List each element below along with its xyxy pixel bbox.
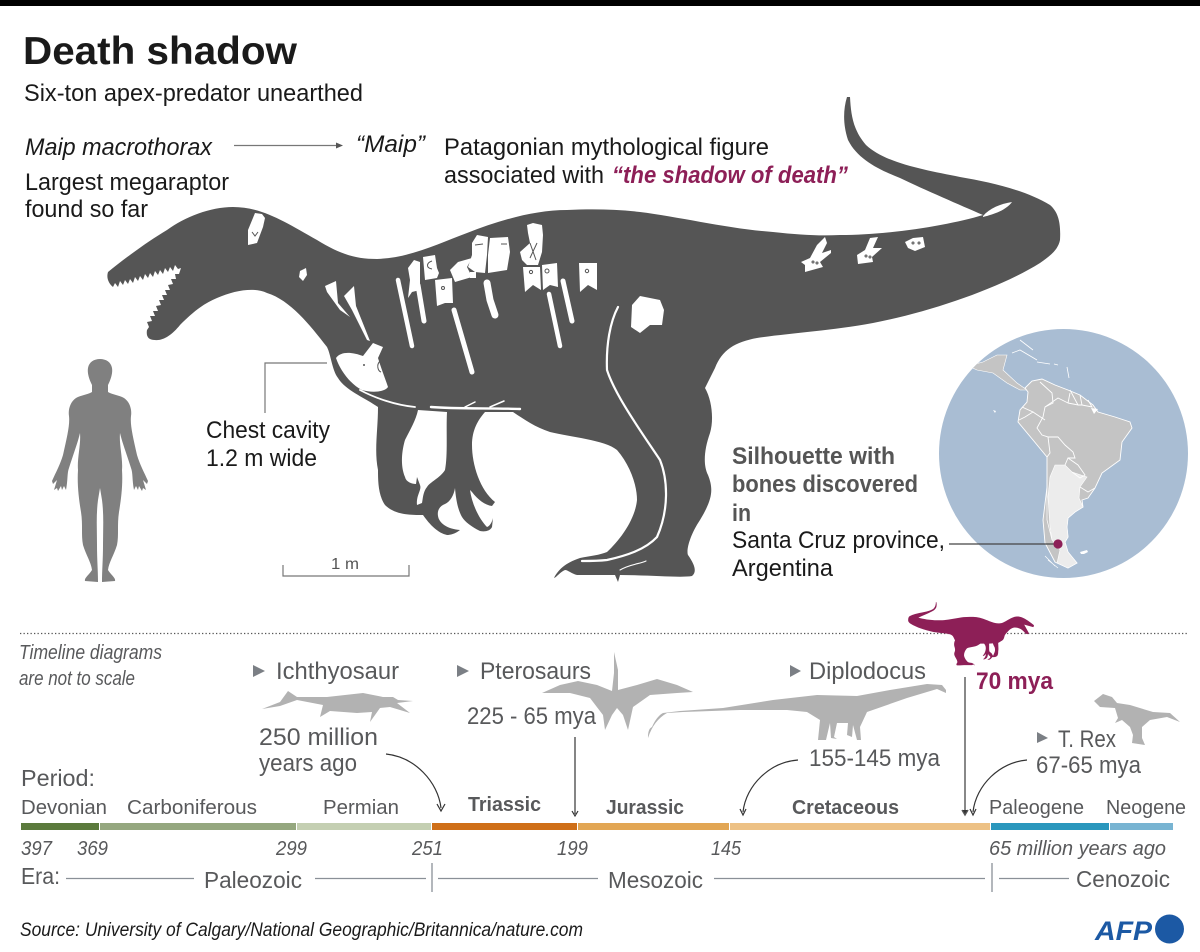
era row: Paleozoic <box>204 867 302 893</box>
era row: Cenozoic <box>1076 866 1170 892</box>
timeline dates: 397 <box>21 837 53 860</box>
species name annotation: found so far <box>25 196 148 223</box>
arrow: diplodocus to timeline <box>740 760 798 815</box>
vertebrae <box>408 223 597 306</box>
subtitle: Six-ton apex-predator unearthed <box>24 80 363 107</box>
map: South America globe <box>939 329 1188 578</box>
timeline dates: 251 <box>411 837 443 860</box>
Central America <box>968 355 1027 390</box>
vertebra marks <box>252 232 920 290</box>
arrow: T. rex to timeline <box>970 760 1027 815</box>
arrow: pterosaur to timeline <box>572 737 578 816</box>
gap between arm and leg <box>402 410 447 505</box>
mythology note <box>444 134 849 189</box>
timeline bar <box>21 823 1173 830</box>
T. rex label <box>1036 726 1141 779</box>
note: scale: are not to scale <box>19 667 135 690</box>
AFP logo <box>1094 914 1184 946</box>
tail and leg bones <box>631 202 1012 333</box>
belly and leg lines <box>360 307 666 570</box>
note: scale <box>19 641 162 690</box>
timeline dates <box>21 837 1166 860</box>
arrow: Maip to timeline <box>962 677 968 815</box>
scale bar: 1 m <box>331 556 359 573</box>
location text <box>732 443 945 582</box>
location leader line <box>949 543 1056 545</box>
ichthyosaur label: 250 million <box>259 724 378 751</box>
period labels <box>21 793 1186 819</box>
ichthyosaur label <box>253 658 399 777</box>
chest cavity label <box>206 417 331 472</box>
diplodocus label: Diplodocus <box>809 658 926 685</box>
pterosaur label <box>457 658 596 730</box>
mythology note: “the shadow of death” <box>612 162 849 189</box>
icon: ichthyosaur silhouette <box>262 691 413 722</box>
Argentina <box>1048 465 1087 568</box>
dinosaur silhouette with bones <box>107 97 1060 582</box>
period labels: Paleogene <box>989 796 1084 819</box>
icon: T. rex silhouette <box>1094 694 1180 745</box>
timeline dates: 145 <box>711 837 742 860</box>
icon: pterosaur silhouette <box>542 652 693 730</box>
70 mya label: 70 mya <box>976 668 1054 695</box>
arrow: species to nickname <box>234 142 343 148</box>
country borders <box>1012 340 1095 568</box>
South America land <box>1018 379 1132 568</box>
rib bones <box>398 280 572 372</box>
species name annotation <box>25 134 229 223</box>
icon: human silhouette <box>52 359 148 582</box>
period labels: Devonian <box>21 796 107 819</box>
mythology note: Patagonian mythological figure <box>444 134 769 161</box>
period labels: Triassic <box>468 793 541 816</box>
diplodocus label: 155-145 mya <box>809 745 940 772</box>
timeline dates: 369 <box>77 837 108 860</box>
T. rex label: 67-65 mya <box>1036 752 1141 779</box>
title: Death shadow <box>23 30 298 73</box>
timeline dates: 199 <box>557 837 588 860</box>
mythology note: associated with <box>444 162 604 189</box>
timeline dates: 299 <box>275 837 307 860</box>
scale bar <box>283 556 409 576</box>
chest bone <box>336 343 388 392</box>
icon: diplodocus silhouette <box>648 684 946 740</box>
skull and neck bones <box>248 213 370 341</box>
period heading: Period: <box>21 765 95 791</box>
note: scale: Timeline diagrams <box>19 641 162 664</box>
pterosaur label: Pterosaurs <box>480 658 591 685</box>
source: Source: University of Calgary/National Geographic/Britannica/nature.com <box>20 919 583 941</box>
body silhouette <box>107 97 1060 582</box>
arrow: ichthyosaur to timeline <box>386 754 445 811</box>
chest cavity leader line <box>265 363 327 413</box>
islands <box>993 410 1088 554</box>
maroon Maip silhouette <box>908 602 1034 665</box>
chest cavity label: Chest cavity <box>206 417 331 444</box>
era row <box>21 863 1170 893</box>
period labels: Permian <box>323 796 399 819</box>
ichthyosaur label: Ichthyosaur <box>276 658 399 685</box>
chest cavity label: 1.2 m wide <box>206 445 317 472</box>
AFP logo: AFP <box>1094 916 1153 946</box>
diplodocus label <box>790 658 940 772</box>
species name annotation: Largest megaraptor <box>25 169 229 196</box>
nickname: “Maip” <box>356 131 427 158</box>
T. rex label: T. Rex <box>1058 726 1116 753</box>
location dot <box>1053 539 1063 549</box>
period labels: Carboniferous <box>127 796 257 819</box>
location text: in <box>732 500 751 527</box>
period labels: Cretaceous <box>792 796 899 819</box>
pterosaur label: 225 - 65 mya <box>467 703 596 730</box>
location text: Silhouette with <box>732 443 895 470</box>
location text: Santa Cruz province, <box>732 527 945 554</box>
ichthyosaur label: years ago <box>259 750 357 777</box>
species name annotation: Maip macrothorax <box>25 134 213 161</box>
timeline dates: 65 million years ago <box>989 837 1166 860</box>
period labels: Jurassic <box>606 796 684 819</box>
period labels: Neogene <box>1106 796 1186 819</box>
location text: Argentina <box>732 555 833 582</box>
era row: Era: <box>21 863 60 889</box>
dotted divider <box>20 632 1187 634</box>
era row: Mesozoic <box>608 867 703 893</box>
location text: bones discovered <box>732 471 918 498</box>
